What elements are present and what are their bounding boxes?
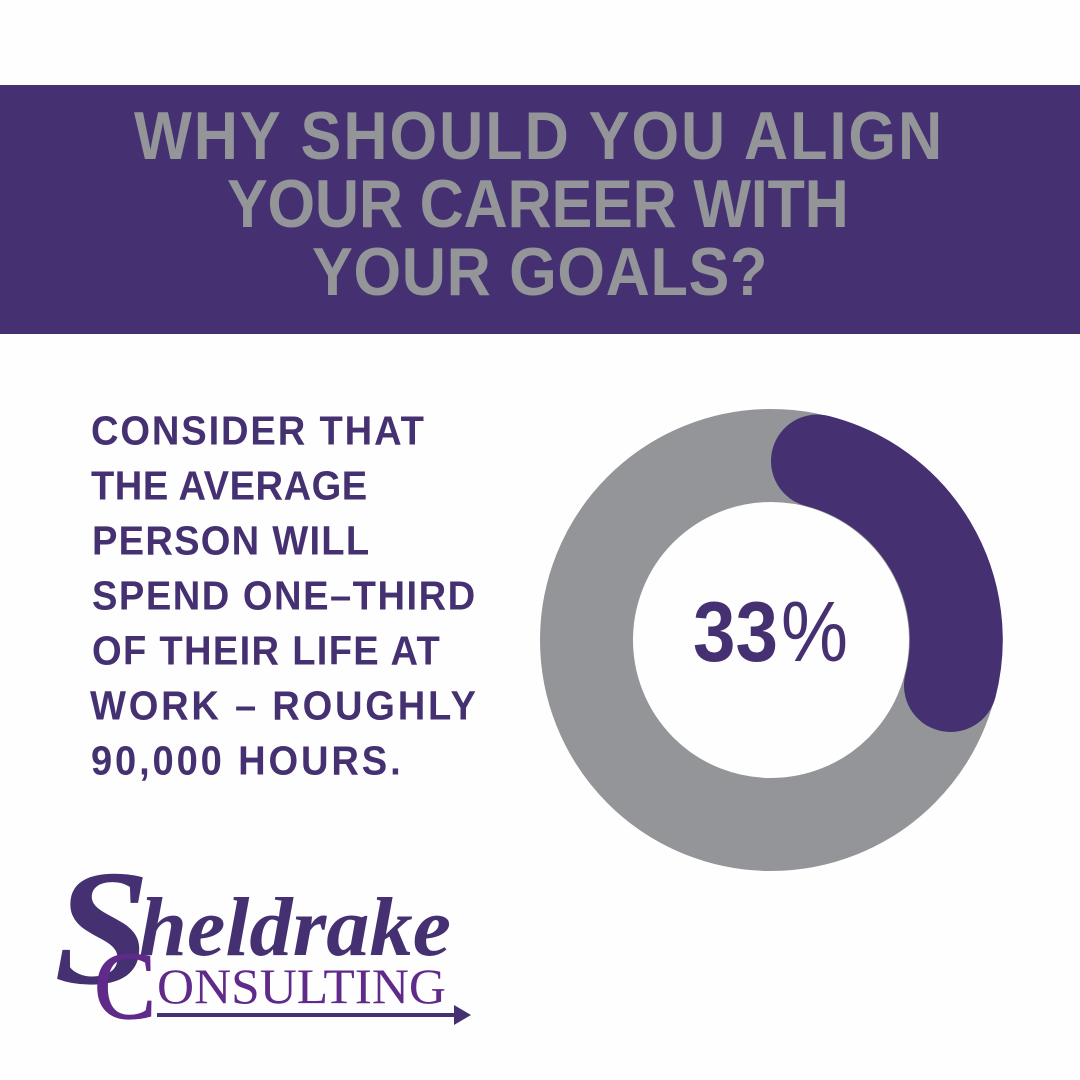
logo: Sheldrake Consulting: [54, 836, 471, 1039]
percentage label: [693, 585, 848, 680]
logo large C: C: [94, 932, 156, 1039]
logo arrow: [157, 1005, 471, 1025]
body text: OF THEIR LIFE AT: [92, 628, 440, 674]
title: YOUR GOALS?: [312, 233, 767, 310]
donut value arc: [818, 461, 956, 686]
logo script S: S: [54, 836, 150, 1019]
body text: SPEND ONE–THIRD: [92, 573, 475, 619]
header banner: [0, 85, 1080, 334]
body text: PERSON WILL: [92, 518, 369, 564]
donut track: [586, 456, 956, 824]
title: YOUR CAREER WITH: [227, 165, 849, 242]
body text: CONSIDER THAT: [91, 408, 424, 454]
logo consulting: ONSULTING: [157, 958, 446, 1014]
body text: 90,000 HOURS.: [91, 738, 401, 784]
body text: WORK – ROUGHLY: [90, 683, 476, 729]
percentage label: 33: [693, 585, 778, 680]
title: [134, 97, 942, 310]
donut chart: 33%: [586, 456, 956, 824]
body text: THE AVERAGE: [91, 463, 367, 509]
percentage label: %: [781, 585, 848, 680]
title: WHY SHOULD YOU ALIGN: [134, 97, 942, 174]
body text: [90, 408, 476, 784]
logo script name: heldrake: [139, 881, 451, 974]
